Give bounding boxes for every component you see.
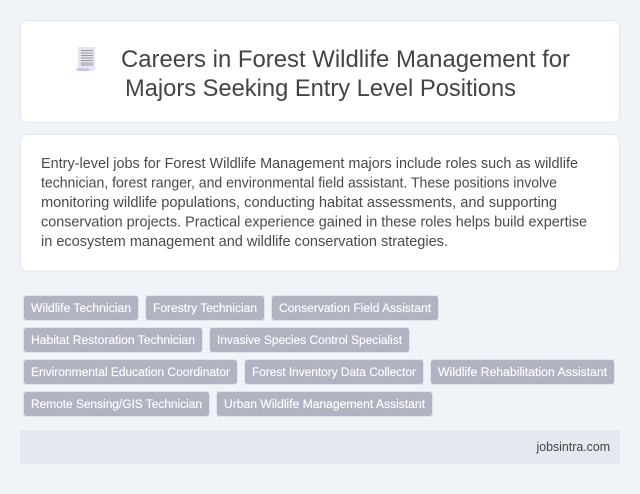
tag: Habitat Restoration Technician: Habitat Restoration Technician [31,333,195,347]
tag: Forest Inventory Data Collector: Forest Inventory Data Collector [252,365,416,379]
tag: Environmental Education Coordinator [24,360,238,384]
text block: description [41,156,587,250]
text block: description: conservation projects. Practical experience gained in these roles helps build expertise [41,214,587,230]
tag: Wildlife Rehabilitation Assistant [430,360,614,384]
tag: Urban Wildlife Management Assistant [216,392,432,416]
footer text: jobsintra.com: jobsintra.com [536,440,610,454]
tag: Conservation Field Assistant [272,296,438,320]
tag: Conservation Field Assistant: Conservation Field Assistant [279,301,432,315]
tag: Invasive Species Control Specialist [210,328,410,352]
title: Careers in Forest Wildlife Management for [121,47,570,73]
text block: description: technician, forest ranger, and environmental field assistant. These positions involve [41,176,557,192]
tag: Forestry Technician: Forestry Technician [153,301,257,315]
text block: description: Entry-level jobs for Forest Wildlife Management majors include roles such as wildlife [41,156,578,172]
tag: Habitat Restoration Technician [24,328,202,352]
tag list [24,296,614,416]
footer bar [20,430,620,464]
tag: Wildlife Rehabilitation Assistant: Wildlife Rehabilitation Assistant [438,365,608,379]
tag: Remote Sensing/GIS Technician [24,392,210,416]
tag: Forestry Technician [146,296,264,320]
icon: paper scroll document [76,47,95,71]
tag: Remote Sensing/GIS Technician: Remote Sensing/GIS Technician [31,397,202,411]
panel: description card [20,134,620,271]
tag: Environmental Education Coordinator: Environmental Education Coordinator [31,365,230,379]
panel: header card [20,20,620,122]
title [121,47,570,102]
tag: Wildlife Technician [24,296,138,320]
tag: Invasive Species Control Specialist: Invasive Species Control Specialist [217,333,403,347]
tag: Wildlife Technician: Wildlife Technician [31,301,131,315]
title: Majors Seeking Entry Level Positions [125,76,516,102]
text block: description: monitoring wildlife populations, conducting habitat assessments, and supporting [41,195,557,211]
tag: Forest Inventory Data Collector [244,360,424,384]
tag: Urban Wildlife Management Assistant: Urban Wildlife Management Assistant [224,397,426,411]
text block: description: in ecosystem management and wildlife conservation strategies. [41,234,448,250]
